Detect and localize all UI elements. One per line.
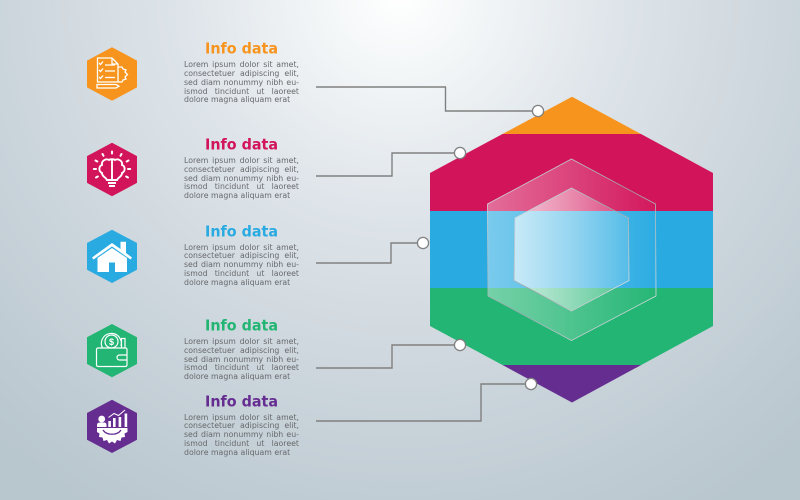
body copy: item 5: dolore magna aliquam erat xyxy=(184,448,290,457)
body copy: item 3: dolore magna aliquam erat xyxy=(184,278,290,287)
body copy: item 3: sed diam nonummy nibh eu- xyxy=(184,260,299,269)
hexagon band: blue xyxy=(430,211,713,288)
icon: checklist with gear and pencil xyxy=(87,47,137,101)
body copy: item 4 xyxy=(184,338,299,382)
body copy: item 4: dolore magna aliquam erat xyxy=(184,372,290,381)
body copy: item 5: sed diam nonummy nibh eu- xyxy=(184,430,299,439)
connector 2: crimson xyxy=(316,147,466,176)
body copy: item 3: consectetuer adipiscing elit, xyxy=(184,251,299,260)
body copy: item 3: ismod tincidunt ut laoreet xyxy=(184,269,299,278)
body copy: item 2: sed diam nonummy nibh eu- xyxy=(184,174,299,182)
body copy: item 4: sed diam nonummy nibh eu- xyxy=(184,354,299,364)
body copy: item 2: dolore magna aliquam erat xyxy=(184,191,290,200)
outer glass hexagon xyxy=(488,159,656,340)
body copy: item 2 xyxy=(184,157,299,201)
hexagon band: green xyxy=(430,288,713,365)
text block: item 1 xyxy=(184,39,299,105)
connector 5: purple xyxy=(316,378,537,421)
text block: item 5 xyxy=(184,392,299,458)
body copy: item 4: ismod tincidunt ut laoreet xyxy=(184,363,299,372)
body copy: item 1: consectetuer adipiscing elit, xyxy=(184,69,299,78)
icon: gear with growth chart xyxy=(87,400,137,453)
body copy: item 5: ismod tincidunt ut laoreet xyxy=(184,439,299,448)
body copy: item 5 xyxy=(184,414,299,458)
hexagon band: crimson xyxy=(430,134,713,211)
heading: item 2: Info data xyxy=(205,135,278,153)
text block: item 3 xyxy=(184,222,299,288)
icon: house xyxy=(87,230,137,283)
connector 4: green xyxy=(316,339,466,368)
body copy: item 3 xyxy=(184,244,299,288)
heading: item 3: Info data xyxy=(205,222,278,240)
icon: brain lightbulb xyxy=(87,143,137,196)
connector 1: orange xyxy=(316,87,544,117)
body copy: item 4: consectetuer adipiscing elit, xyxy=(184,346,299,355)
body copy: item 5: consectetuer adipiscing elit, xyxy=(184,421,299,430)
heading: item 4: Info data xyxy=(205,316,278,334)
inner glass hexagon xyxy=(514,188,629,311)
hexagon band: purple xyxy=(502,365,642,402)
body copy: item 2: consectetuer adipiscing elit, xyxy=(184,165,299,174)
icon: wallet with coin: $ xyxy=(109,337,114,347)
body copy: item 1 xyxy=(184,61,299,105)
text block: item 4 xyxy=(184,316,299,382)
connector 3: blue xyxy=(316,237,429,263)
heading: item 5: Info data xyxy=(205,392,278,410)
body copy: item 2: ismod tincidunt ut laoreet xyxy=(184,182,299,191)
body copy: item 1: dolore magna aliquam erat xyxy=(184,95,290,104)
body copy: item 1: ismod tincidunt ut laoreet xyxy=(184,87,299,96)
hexagon band: orange xyxy=(502,96,642,134)
text block: item 2 xyxy=(184,135,299,201)
central striped hexagon xyxy=(430,96,713,403)
icon: wallet with coin xyxy=(87,324,137,377)
heading: item 1: Info data xyxy=(205,39,278,57)
body copy: item 1: sed diam nonummy nibh eu- xyxy=(184,78,299,87)
